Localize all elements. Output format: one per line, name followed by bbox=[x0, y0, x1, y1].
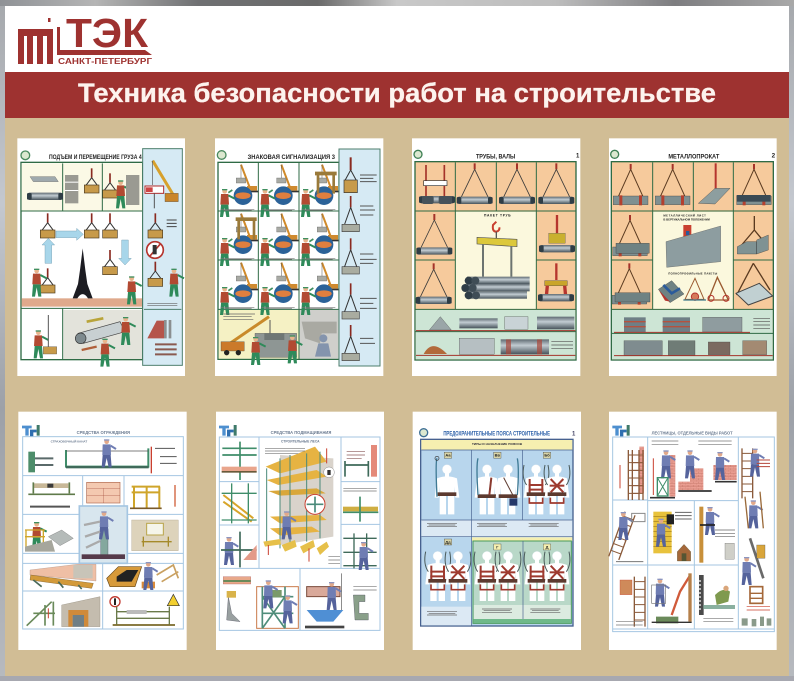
caption lines bbox=[427, 523, 560, 615]
type labels: Вв bbox=[495, 453, 501, 458]
poster 4 logo bbox=[611, 150, 619, 158]
section header text: ТИПЫ И НАЗНАЧЕНИЕ ПОЯСОВ bbox=[472, 442, 523, 446]
metal sheet center: МЕТАЛЛИЧЕСКИЙ ЛИСТ bbox=[663, 214, 706, 218]
metal sheet center: ПОЛНОПРОФИЛЬНЫЕ ПАКЕТЫ bbox=[668, 272, 718, 276]
tinted cells bbox=[611, 162, 773, 360]
rolled metal on slings bbox=[612, 163, 773, 305]
ladder on wall bbox=[620, 447, 644, 500]
poster 6 logo bbox=[219, 425, 237, 436]
belt figures upper row bbox=[435, 456, 570, 514]
poster 4 title: МЕТАЛЛОПРОКАТ bbox=[668, 154, 719, 161]
section grid bbox=[219, 437, 380, 630]
poster 1 logo bbox=[21, 151, 30, 160]
right column bbox=[742, 448, 771, 626]
tall ladder center bbox=[79, 506, 127, 563]
belt figures lower row bbox=[425, 551, 570, 601]
storage diagrams bbox=[614, 317, 773, 356]
pipe bundle on traverse: ПАКЕТ ТРУБ bbox=[484, 214, 511, 218]
side scenes bbox=[25, 520, 178, 552]
blue cells bbox=[421, 439, 573, 626]
section grid bbox=[613, 437, 774, 632]
right panel slung loads bbox=[339, 149, 380, 366]
Eiffel tower bbox=[73, 248, 93, 298]
type labels: Бб bbox=[544, 453, 550, 458]
pole climbing bbox=[699, 507, 735, 563]
main scaffold bbox=[263, 439, 340, 563]
metal sheet center: В ВЕРТИКАЛЬНОМ ПОЛОЖЕНИИ bbox=[663, 217, 710, 221]
tinted cells bbox=[415, 162, 576, 360]
poster: предохранительные пояса bbox=[413, 412, 581, 650]
pipes on slings bbox=[416, 163, 575, 304]
storage diagrams bbox=[416, 317, 575, 355]
type labels bbox=[444, 452, 551, 550]
left cells bbox=[221, 442, 257, 567]
poster 6 title: СРЕДСТВА ПОДМАЩИВАНИЯ bbox=[271, 430, 331, 435]
grid of signalling cells bbox=[218, 162, 339, 359]
white header area bbox=[5, 6, 789, 72]
lower section: worker and pipe bbox=[34, 315, 136, 367]
poster 5 title: СРЕДСТВА ОГРАЖДЕНИЯ bbox=[77, 430, 130, 435]
left ladder person bbox=[609, 512, 645, 562]
platform scenes bbox=[30, 562, 178, 590]
guard rope scene: СТРАХОВОЧНЫЙ КАНАТ bbox=[51, 440, 87, 444]
standing ladder bbox=[616, 577, 645, 627]
poster 7 logo bbox=[420, 429, 428, 437]
poster 8 logo bbox=[612, 425, 630, 436]
type labels: Дд bbox=[445, 539, 451, 544]
guard rope scene bbox=[28, 439, 177, 473]
poster 1 title: ПОДЪЕМ И ПЕРЕМЕЩЕНИЕ ГРУЗА 4 bbox=[49, 154, 142, 161]
poster: подъем и перемещение груза bbox=[17, 138, 185, 376]
type labels: Аа bbox=[445, 453, 451, 458]
bottom cells bbox=[223, 573, 377, 628]
poster: трубы, валы bbox=[412, 138, 580, 376]
main scaffold: СТРОИТЕЛЬНЫЕ ЛЕСА bbox=[281, 439, 320, 443]
bricklaying scenes bbox=[650, 441, 737, 498]
metal sheet center bbox=[658, 214, 729, 303]
poster 2 logo bbox=[217, 151, 226, 159]
rail fences bbox=[28, 482, 175, 508]
bottom crane scene bbox=[221, 314, 302, 365]
poster: металлопрокат bbox=[609, 138, 777, 376]
poster 5 logo bbox=[22, 425, 40, 436]
poster 3 title: ТРУБЫ, ВАЛЫ bbox=[476, 154, 516, 161]
type labels: Г bbox=[496, 544, 499, 549]
poster: средства подмащивания bbox=[216, 412, 384, 650]
poster: знаковая сигнализация bbox=[215, 138, 383, 376]
poster 3 logo bbox=[414, 150, 422, 158]
poster 3 number: 1 bbox=[576, 153, 580, 159]
poster 7 number: 1 bbox=[572, 431, 576, 437]
right cells bbox=[343, 445, 378, 570]
section grid bbox=[23, 437, 183, 629]
grey warning cell bbox=[302, 322, 337, 357]
poster 2 title: ЗНАКОВАЯ СИГНАЛИЗАЦИЯ 3 bbox=[248, 154, 335, 161]
logo: ТЭК Санкт-Петербург: ТЭК bbox=[66, 10, 149, 56]
poster 8 title: ЛЕСТНИЦЫ, ОТДЕЛЬНЫЕ ВИДЫ РАБОТ bbox=[652, 430, 733, 435]
poster: лестницы, отдельные виды работ bbox=[609, 412, 777, 650]
poster 4 number: 2 bbox=[772, 152, 776, 159]
loads with movement arrows bbox=[32, 213, 142, 304]
lifting examples top row bbox=[27, 168, 139, 208]
aerial lift bbox=[652, 573, 692, 623]
main frame with sections bbox=[21, 162, 143, 360]
pipe bundle on traverse bbox=[461, 214, 530, 299]
title banner: Техника безопасности работ на строительстве bbox=[78, 78, 716, 108]
poster: средства ограждения bbox=[18, 412, 187, 650]
right panel: crane and prohibited actions bbox=[143, 149, 184, 365]
logo: ТЭК Санкт-Петербург: САНКТ-ПЕТЕРБУРГ bbox=[58, 56, 152, 66]
poster 7 title: ПРЕДОХРАНИТЕЛЬНЫЕ ПОЯСА СТРОИТЕЛЬНЫЕ bbox=[443, 431, 550, 438]
center stairs scene bbox=[653, 512, 692, 561]
welding scene bbox=[699, 575, 735, 622]
bottom scenes bbox=[27, 594, 179, 627]
title banner bbox=[5, 72, 789, 118]
logo: ТЭК Санкт-Петербург bbox=[18, 10, 152, 66]
type labels: Д bbox=[546, 544, 549, 549]
